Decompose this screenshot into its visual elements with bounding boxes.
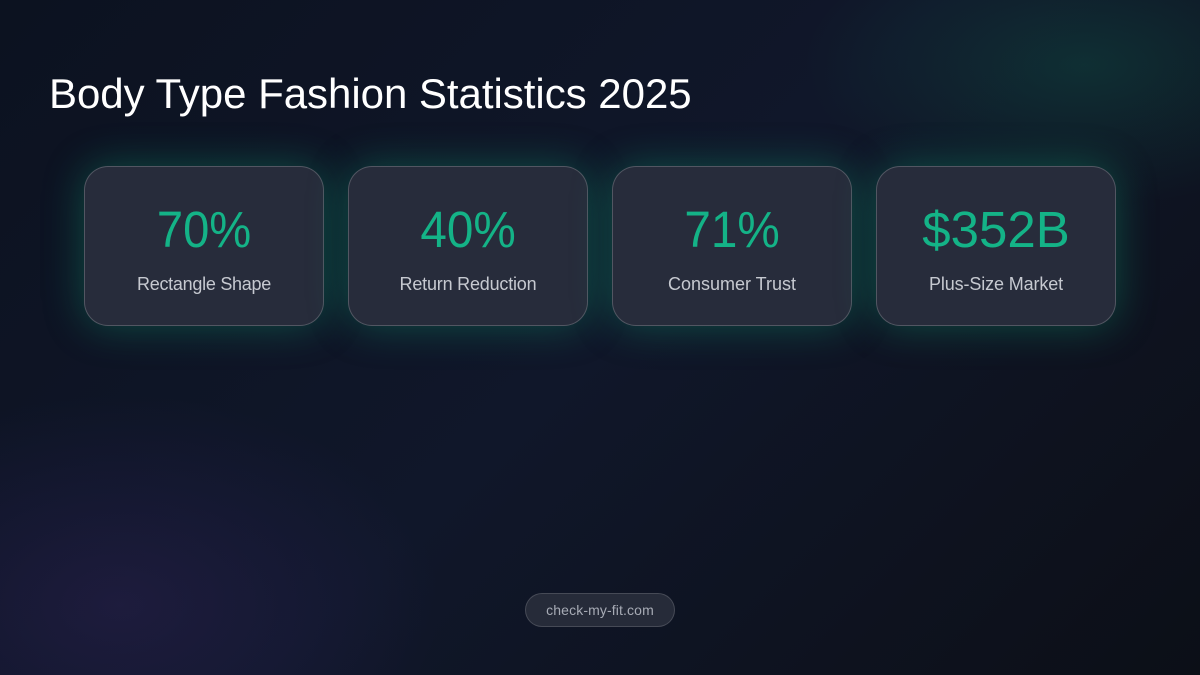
stat value: $352B: $352B bbox=[922, 201, 1070, 258]
stat label: Return Reduction: Return Reduction bbox=[400, 274, 536, 294]
stat card: Plus-Size Market bbox=[876, 166, 1116, 326]
stat label: Consumer Trust: Consumer Trust bbox=[668, 274, 796, 294]
stat value: 71%: 71% bbox=[684, 201, 780, 258]
stat card: Rectangle Shape bbox=[84, 166, 324, 326]
stat value: 40%: 40% bbox=[420, 201, 516, 258]
source pill: check-my-fit.com: check-my-fit.com bbox=[546, 602, 654, 618]
title: Body Type Fashion Statistics 2025 bbox=[49, 70, 692, 117]
stat card: Consumer Trust bbox=[612, 166, 852, 326]
stat card: Return Reduction bbox=[348, 166, 588, 326]
stat value: 70%: 70% bbox=[157, 201, 251, 258]
source pill: check-my-fit.com bbox=[525, 593, 675, 627]
stat label: Rectangle Shape: Rectangle Shape bbox=[137, 274, 271, 294]
stat label: Plus-Size Market: Plus-Size Market bbox=[929, 274, 1063, 294]
